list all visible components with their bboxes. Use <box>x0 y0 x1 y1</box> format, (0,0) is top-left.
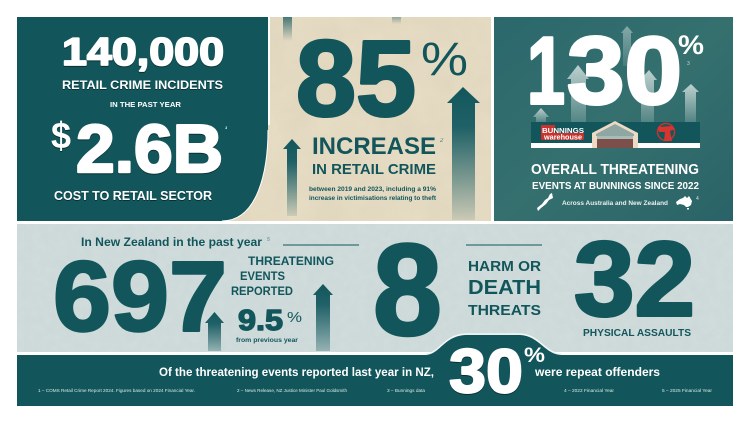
label: harm or death threats: THREATS <box>468 303 541 319</box>
label: threatening events reported: REPORTED <box>231 286 293 298</box>
label: harm or death threats: DEATH <box>468 277 541 299</box>
arrow: tall <box>313 284 333 351</box>
stat: dollar sign: $ <box>51 115 71 156</box>
label: harm or death threats: HARM OR <box>468 259 542 275</box>
footnotes: 1 – COMS Retail Crime Report 2024. Figures based on 2024 Financial Year. <box>38 388 195 393</box>
arrow: small <box>205 312 224 351</box>
panel: Bunnings 130 percent <box>494 17 733 221</box>
footnotes <box>38 388 713 393</box>
text: of the threatening events: Of the threatening events reported last year in NZ, <box>159 367 434 379</box>
background arrows <box>533 26 699 122</box>
footnote marker 5: 5 <box>267 237 270 243</box>
percent sign: % <box>678 30 704 60</box>
divider right <box>466 244 542 246</box>
label: overall threatening: OVERALL THREATENING <box>531 162 699 178</box>
icon: New Zealand <box>537 193 553 211</box>
percent sign: % <box>524 344 545 367</box>
stat: 9.5 percent: 9.5 <box>238 305 283 337</box>
logo: Bunnings warehouse: warehouse <box>543 134 582 142</box>
arrow: top fade centre <box>392 17 401 24</box>
label: harm or death threats <box>468 259 542 319</box>
heading: In New Zealand in the past year: In New Zealand in the past year <box>81 237 263 249</box>
footnotes: 5 – 2025 Financial Year <box>662 388 713 393</box>
label: in retail crime: IN RETAIL CRIME <box>312 161 436 178</box>
stat: 32: 32 <box>574 220 695 338</box>
footnote marker 3: 3 <box>687 61 690 67</box>
stat: 130 <box>527 18 682 124</box>
label: across Australia and New Zealand: Across Australia and New Zealand <box>562 200 668 207</box>
arrow: large right <box>447 87 480 220</box>
detail text <box>309 187 437 202</box>
footnote marker 2: 2 <box>439 138 444 144</box>
stat: 85: 85 <box>296 18 416 138</box>
label: from previous year: from previous year <box>236 337 298 344</box>
stat: 130: 30 <box>567 18 682 124</box>
panel: repeat offenders band <box>17 334 733 406</box>
illustration: Bunnings store <box>531 121 700 148</box>
label: threatening events reported <box>231 256 334 298</box>
panel: New Zealand statistics <box>17 216 733 362</box>
label: threatening events reported: EVENTS <box>240 271 285 283</box>
divider left <box>283 244 359 246</box>
stat: 697: 697 <box>53 240 227 352</box>
stat: 9.5 percent <box>238 305 302 337</box>
icon: Australia <box>676 196 692 210</box>
footnote marker 1: 1 <box>225 125 228 130</box>
label: events at Bunnings since 2022: EVENTS AT BUNNINGS SINCE 2022 <box>532 181 699 192</box>
arrow: top fade left <box>283 17 292 41</box>
stat: 8: 8 <box>373 216 442 362</box>
footnotes: 4 – 2022 Financial Year <box>564 388 615 393</box>
footnotes: 2 – News Release, NZ Justice Minister Paul Goldsmith <box>237 388 347 393</box>
arrow: small left <box>283 139 301 216</box>
footnote marker 4: 4 <box>696 196 699 202</box>
panel: 85 percent increase <box>215 17 491 221</box>
label: threatening events reported: THREATENING <box>248 256 334 268</box>
label: retail crime incidents: RETAIL CRIME INCIDENTS <box>62 78 223 92</box>
stat: 140,000: 140,000 <box>62 31 224 74</box>
building <box>592 121 638 148</box>
percent sign: % <box>421 32 468 85</box>
stat: 130: 1 <box>527 18 565 124</box>
label: increase: INCREASE <box>312 133 436 160</box>
stat: 2.6B: 2.6B <box>76 111 223 187</box>
stat: 9.5 percent: % <box>287 309 302 326</box>
logo: hammer <box>658 124 675 141</box>
detail text: increase in victimisations relating to theft <box>309 196 436 202</box>
text: were repeat offenders: were repeat offenders <box>534 367 660 379</box>
stat: 30: 30 <box>449 338 523 406</box>
logo: Bunnings warehouse <box>541 125 584 142</box>
footnotes: 3 – Bunnings data <box>387 388 426 393</box>
detail text: between 2019 and 2023, including a 91% <box>309 187 437 193</box>
panel: retail crime incidents <box>17 17 268 221</box>
label: physical assaults: PHYSICAL ASSAULTS <box>583 328 691 339</box>
label: in the past year: IN THE PAST YEAR <box>110 100 182 109</box>
label: cost to retail sector: COST TO RETAIL SECTOR <box>54 188 213 203</box>
logo: Bunnings warehouse: BUNNINGS <box>542 126 584 135</box>
